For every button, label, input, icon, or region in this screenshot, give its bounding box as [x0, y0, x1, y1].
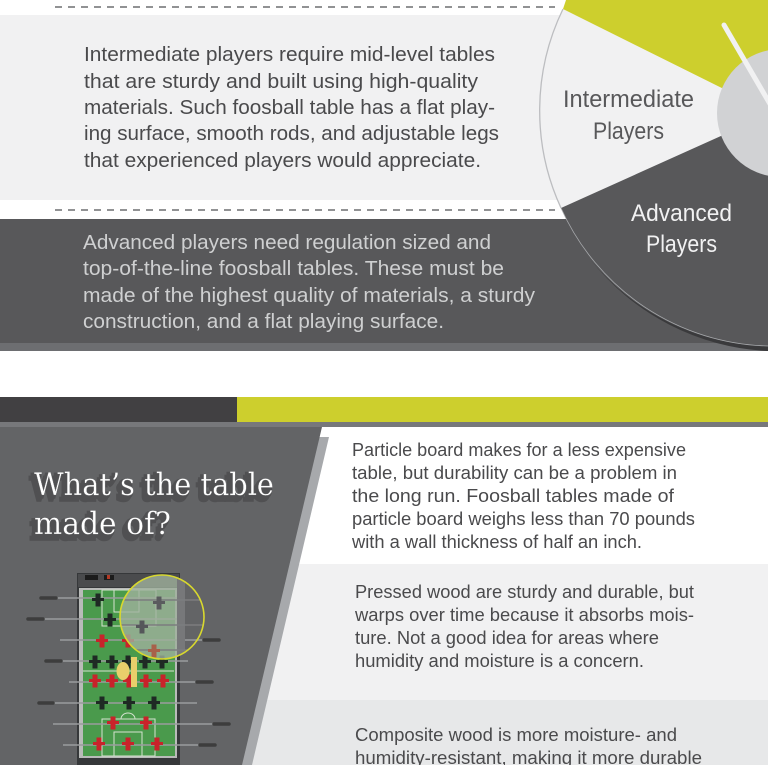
heading: What’s the table [32, 469, 272, 505]
label: advanced players: Advanced [631, 200, 732, 227]
heading [30, 467, 274, 547]
header band [0, 397, 768, 427]
label: intermediate players: Players [593, 118, 664, 145]
heading: made of? [30, 511, 167, 547]
label: advanced players: Players [646, 231, 717, 258]
heading: What’s the table [34, 467, 274, 503]
rods [28, 598, 229, 745]
text: particle board: the long run. Foosball tables made of [352, 485, 675, 506]
text: particle board: particle board weighs less than 70 pounds [352, 508, 695, 529]
needle [724, 25, 768, 104]
text: particle board [351, 439, 695, 552]
text: pressed wood: Pressed wood are sturdy and durable, but [355, 581, 694, 602]
text: pressed wood [354, 581, 694, 671]
magnifier [120, 575, 204, 659]
text: intermediate description [84, 44, 499, 172]
table logo [116, 657, 137, 687]
text: particle board: table, but durability can be a problem in [352, 462, 677, 483]
panel: advanced players [0, 219, 768, 351]
panel: material rows [240, 427, 768, 765]
text: advanced description: construction, and a flat playing surface. [83, 311, 444, 333]
players: black team [89, 594, 168, 710]
text: intermediate description: that experienced players would appreciate. [84, 150, 481, 172]
text: intermediate description: Intermediate players require mid-level tables [84, 44, 495, 66]
label: intermediate players [563, 86, 694, 145]
panel: what's the table made of [0, 427, 329, 765]
foosball table illustration [28, 573, 229, 765]
text: pressed wood: humidity and moisture is a concern. [355, 650, 644, 671]
text: intermediate description: materials. Such foosball table has a flat play- [84, 97, 495, 119]
players: red team [89, 634, 169, 750]
heading: made of? [32, 508, 169, 544]
label: intermediate players: Intermediate [563, 86, 694, 113]
text: pressed wood: warps over time because it absorbs mois- [354, 604, 694, 625]
text: composite wood: Composite wood is more moisture- and [355, 724, 677, 745]
panel: intermediate players [0, 15, 600, 200]
text: advanced description: Advanced players need regulation sized and [83, 232, 491, 254]
wheel chart: player levels [540, 0, 768, 351]
text: advanced description: top-of-the-line foosball tables. These must be [83, 258, 504, 280]
text: particle board: Particle board makes for a less expensive [352, 439, 686, 460]
text: particle board: with a wall thickness of half an inch. [351, 531, 642, 552]
text: advanced description: made of the highest quality of materials, a sturdy [83, 285, 535, 307]
text: composite wood [355, 724, 702, 765]
text: intermediate description: ing surface, smooth rods, and adjustable legs [84, 123, 499, 145]
hub [717, 49, 768, 177]
label: advanced players [631, 200, 732, 258]
text: intermediate description: that are sturdy and built using high-quality [84, 71, 478, 93]
text: advanced description [83, 232, 535, 333]
heading: made of? [34, 506, 171, 542]
heading: What’s the table [30, 472, 270, 508]
text: pressed wood: ture. Not a good idea for areas where [355, 627, 659, 648]
